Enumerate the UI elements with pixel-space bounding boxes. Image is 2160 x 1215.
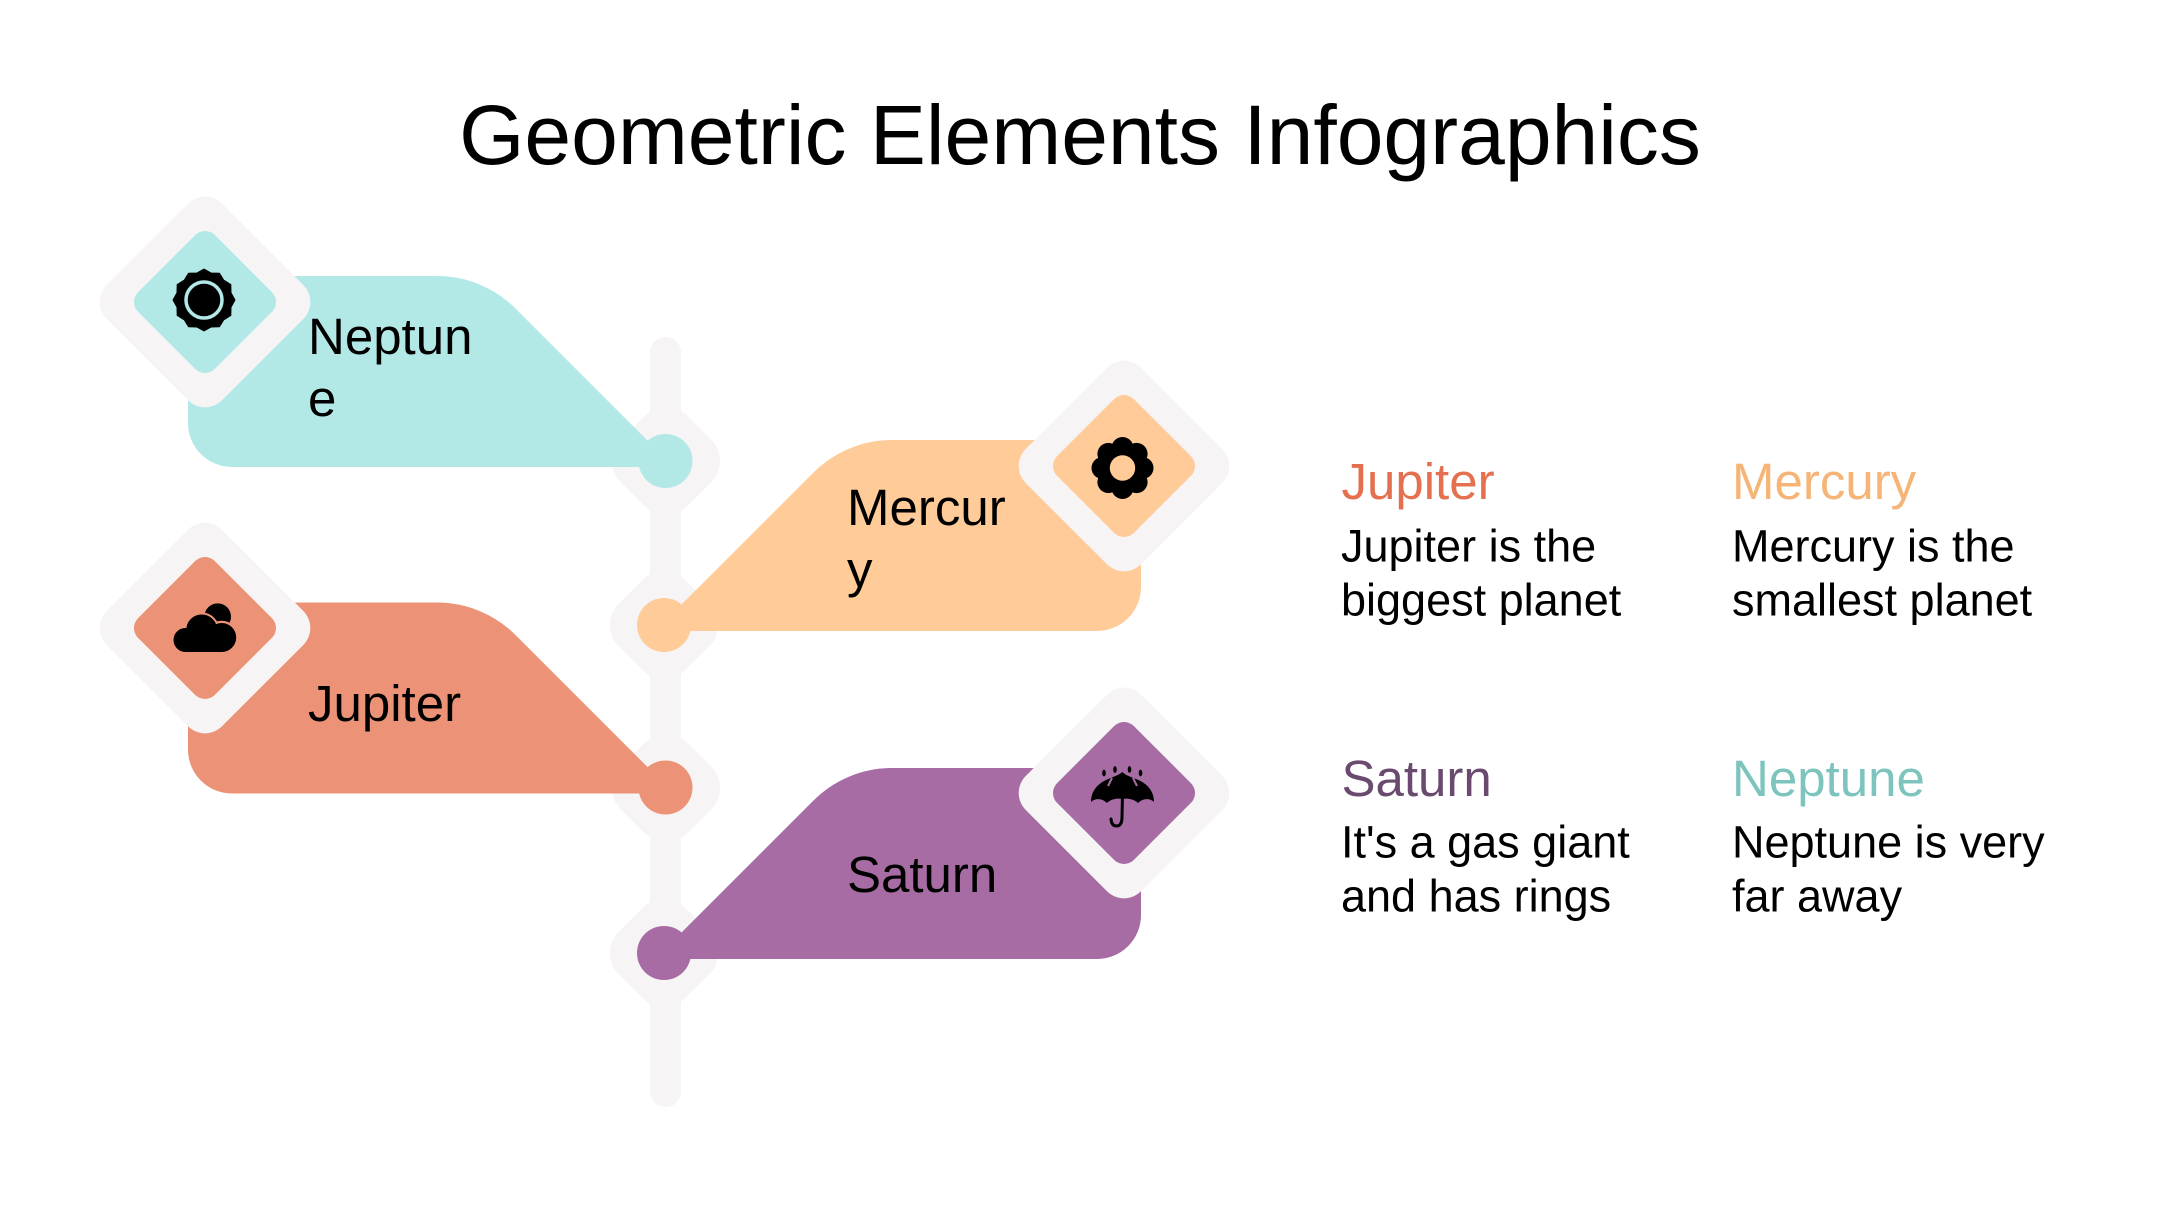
panel: Neptune	[90, 187, 693, 488]
text block: Mercury	[1732, 453, 2033, 626]
Mercury label: Mercur	[847, 479, 1006, 536]
Jupiter label: Jupiter	[308, 675, 461, 732]
Neptune node	[638, 434, 692, 488]
text block: Jupiter	[1341, 453, 1622, 626]
Neptune label: Neptun	[308, 308, 472, 365]
panel: Mercury	[637, 351, 1239, 652]
Mercury flag shape	[669, 440, 1141, 631]
Jupiter flag shape	[188, 602, 660, 794]
Neptune diamond	[90, 187, 320, 417]
Mercury label: y	[847, 541, 873, 598]
text block: Jupiter: biggest planet	[1341, 574, 1622, 626]
text block: Mercury: smallest planet	[1732, 574, 2033, 626]
Mercury diamond	[1009, 351, 1239, 581]
Neptune flag shape	[188, 276, 660, 467]
text block: Saturn: It's a gas giant	[1341, 816, 1630, 868]
Saturn diamond	[1009, 678, 1239, 908]
text block: Mercury: Mercury is the	[1732, 520, 2015, 572]
text block: Jupiter: Jupiter	[1342, 453, 1495, 510]
text block: Mercury: Mercury	[1732, 453, 1917, 510]
text block: Neptune: Neptune is very	[1732, 816, 2045, 868]
icon: sun badge	[173, 269, 235, 331]
text block: Neptune	[1732, 750, 2045, 922]
Saturn label: Saturn	[847, 846, 997, 903]
text block: Saturn	[1341, 750, 1630, 922]
Jupiter node	[638, 760, 692, 814]
panel: Saturn	[637, 678, 1239, 980]
text block: Neptune: far away	[1732, 870, 1903, 922]
Jupiter diamond	[90, 513, 320, 743]
Neptune label: e	[308, 370, 336, 427]
Saturn node	[637, 926, 691, 980]
icon: cloud	[174, 603, 236, 652]
timeline spine	[598, 337, 732, 1107]
Mercury node	[637, 598, 691, 652]
text block: Jupiter: Jupiter is the	[1341, 520, 1596, 572]
text block: Neptune: Neptune	[1732, 750, 1925, 807]
icon: flower	[1092, 437, 1154, 499]
title: Geometric Elements Infographics	[459, 88, 1701, 182]
panel: Jupiter	[90, 513, 693, 814]
text block: Saturn: Saturn	[1342, 750, 1492, 807]
Saturn flag shape	[669, 768, 1141, 959]
text block: Saturn: and has rings	[1341, 870, 1611, 922]
icon: umbrella	[1091, 766, 1154, 826]
